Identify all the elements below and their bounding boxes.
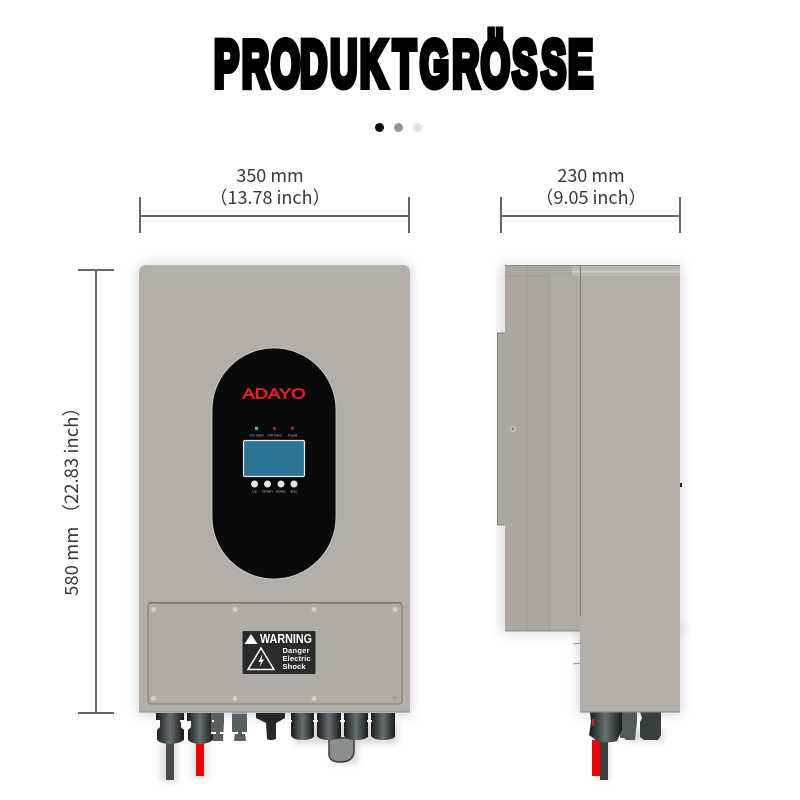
rear housing <box>505 265 580 631</box>
status lights <box>249 427 298 438</box>
warning label <box>242 631 316 674</box>
solar connector 1 <box>211 713 224 741</box>
buttons: Enter <box>276 488 286 494</box>
bracket screw <box>511 427 515 431</box>
cable gland 2 <box>187 713 213 744</box>
display oval <box>212 348 336 579</box>
width dimension: front: 350 mm <box>236 162 304 188</box>
loop cable <box>329 738 354 762</box>
height dimension <box>58 270 114 713</box>
width dimension: side <box>501 162 680 233</box>
hook marks <box>573 643 581 664</box>
warning label: WARNING <box>260 632 312 646</box>
glands row <box>291 713 395 740</box>
buttons <box>251 480 298 494</box>
warning label: Danger <box>282 646 310 655</box>
rear connectors <box>620 712 637 740</box>
width dimension: front <box>140 162 409 233</box>
width dimension: side: 230 mm <box>557 162 625 188</box>
small connector <box>256 713 285 740</box>
connector highlights <box>156 721 372 733</box>
buttons: Esc <box>291 488 297 494</box>
red cable <box>592 740 601 776</box>
width dimension: side: （9.05 inch） <box>535 184 647 210</box>
red cable <box>196 740 204 776</box>
black cable <box>166 740 174 780</box>
height dimension: 580 mm （22.83 inch） <box>58 398 84 596</box>
mounting bracket <box>497 333 515 525</box>
front view of inverter <box>138 264 412 782</box>
status lights: On Grid <box>249 432 264 438</box>
enclosure <box>139 265 410 712</box>
side port <box>680 483 682 487</box>
wiring cover <box>148 603 402 704</box>
cable gland 1 <box>156 713 184 744</box>
cover screws <box>151 607 398 701</box>
warning label: Shock <box>282 662 306 671</box>
status lights: Off Grid <box>268 432 281 438</box>
front connectors <box>156 713 398 782</box>
title: PRODUKTGRÖSSE <box>214 28 593 101</box>
LCD screen <box>244 440 304 476</box>
buttons: Up <box>252 488 258 494</box>
main gland <box>589 712 622 742</box>
solar connector 2 <box>232 713 247 741</box>
side view of inverter <box>497 265 683 780</box>
black cable <box>600 740 608 780</box>
front housing <box>572 265 682 712</box>
width dimension: front: （13.78 inch） <box>209 184 331 210</box>
status lights: Fault <box>288 432 298 438</box>
pagination dots <box>375 123 422 132</box>
logo: ADAYO <box>242 386 306 402</box>
warning label: Electric <box>282 654 310 663</box>
side connectors <box>589 712 664 780</box>
buttons: Down <box>262 488 273 494</box>
